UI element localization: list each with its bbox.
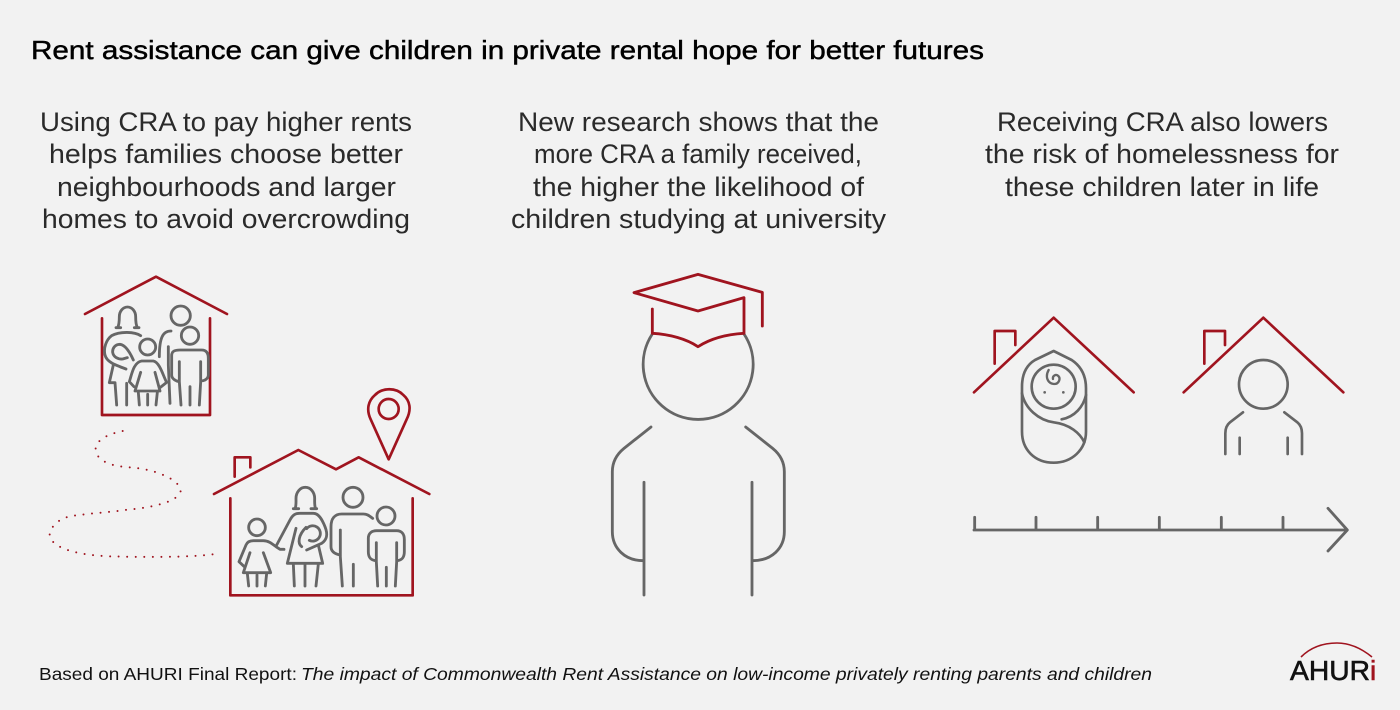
icon: location pin xyxy=(368,389,410,459)
text block: new research on university: children studying at university xyxy=(511,204,887,234)
logo: AHURI: i xyxy=(1370,655,1376,686)
text block: lower risk of homelessness: these children later in life xyxy=(1005,172,1319,202)
text block: new research on university: more CRA a family received, xyxy=(534,139,862,169)
text block: lower risk of homelessness xyxy=(985,107,1339,202)
dotted path between houses xyxy=(50,431,213,557)
icon: larger family house with location pin xyxy=(214,389,429,595)
text block: new research on university xyxy=(511,107,887,234)
footer source note: Based on AHURI Final Report: xyxy=(39,664,297,684)
icon: overcrowded family house xyxy=(85,277,227,415)
icon: young adult in house xyxy=(1184,318,1343,454)
arrow: timeline xyxy=(974,508,1347,551)
logo: AHURI: AHUR xyxy=(1290,655,1370,686)
text block: new research on university: New research shows that the xyxy=(518,107,879,137)
icon: mortarboard xyxy=(634,274,762,347)
text block: using CRA to pay higher rents: helps families choose better xyxy=(49,139,403,169)
text block: lower risk of homelessness: Receiving CRA also lowers xyxy=(997,107,1328,137)
icon: baby in house xyxy=(974,318,1134,463)
footer source note: The impact of Commonwealth Rent Assistance on low-income privately renting parents and children xyxy=(301,664,1152,684)
icon: graduate with mortarboard xyxy=(612,274,784,595)
text block: using CRA to pay higher rents: homes to avoid overcrowding xyxy=(42,204,410,234)
text block: new research on university: the higher the likelihood of xyxy=(533,172,865,202)
title: Rent assistance can give children in private rental hope for better futures xyxy=(31,35,984,65)
logo: AHURI xyxy=(1290,643,1376,686)
text block: lower risk of homelessness: the risk of homelessness for xyxy=(985,139,1339,169)
text block: using CRA to pay higher rents: neighbourhoods and larger xyxy=(57,172,396,202)
text block: using CRA to pay higher rents: Using CRA to pay higher rents xyxy=(40,107,412,137)
text block: using CRA to pay higher rents xyxy=(40,107,412,234)
